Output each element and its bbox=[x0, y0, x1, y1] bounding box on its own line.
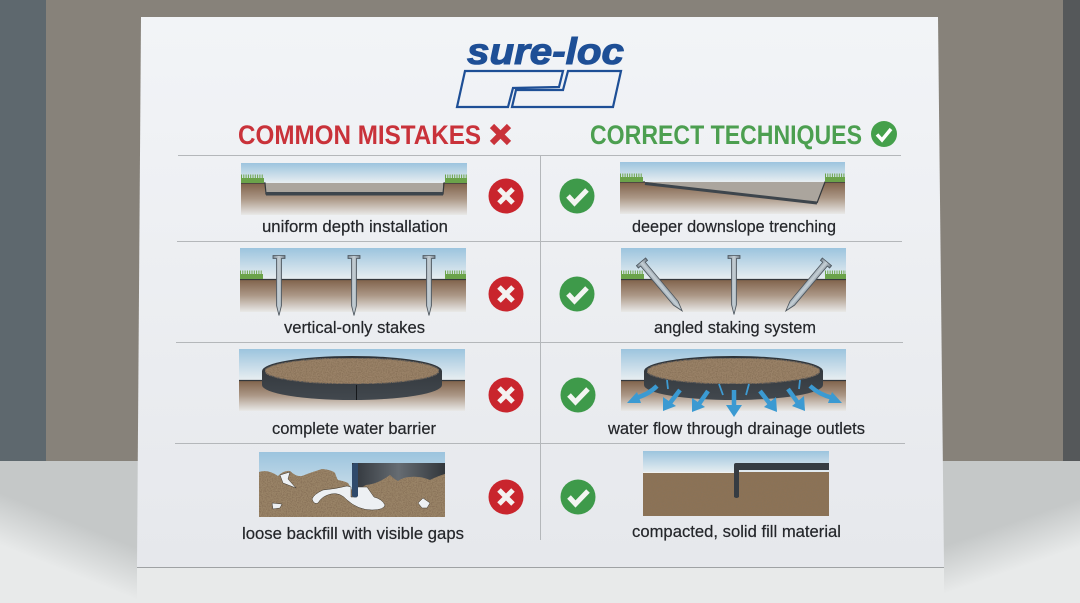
row 3 right: water flow through drainage outlets bbox=[607, 349, 865, 438]
row 4 right: compacted, solid fill material: compacted, solid fill material bbox=[632, 522, 841, 541]
row 1 left: uniform depth installation: uniform depth installation bbox=[262, 217, 448, 236]
table grid lines bbox=[175, 155, 905, 540]
row 4 left: loose backfill with visible gaps: loose backfill with visible gaps bbox=[242, 524, 464, 543]
heading: common mistakes: COMMON MISTAKES bbox=[238, 120, 481, 150]
row 3 left: complete water barrier bbox=[239, 349, 465, 438]
logo: sure-loc bbox=[457, 31, 624, 107]
icon: heading cross bbox=[492, 126, 509, 143]
icon: angled stakes bbox=[636, 256, 832, 315]
logo: sure-loc: sure-loc bbox=[467, 31, 624, 72]
row 3 left: complete water barrier: complete water barrier bbox=[272, 419, 436, 438]
white board panel bbox=[137, 17, 944, 568]
icon: heading check bbox=[871, 121, 897, 147]
row 2 right: angled staking system: angled staking system bbox=[654, 318, 816, 337]
row 2 left: vertical-only stakes: vertical-only stakes bbox=[284, 318, 425, 337]
row 4 left: loose backfill with visible gaps bbox=[242, 452, 464, 543]
icon: edging ring with outlets bbox=[644, 356, 823, 400]
row 3 right: water flow through drainage outlets: water flow through drainage outlets bbox=[607, 419, 865, 438]
row 1 right: deeper downslope trenching: deeper downslope trenching bbox=[632, 217, 836, 236]
row 2 left: vertical-only stakes bbox=[240, 248, 466, 337]
row 1 left: uniform depth installation bbox=[241, 163, 467, 236]
icon: vertical stakes bbox=[273, 256, 435, 316]
row 2 right: angled staking system bbox=[621, 248, 846, 337]
row 4 right: compacted, solid fill material bbox=[632, 451, 841, 541]
icons: green check badges bbox=[560, 178, 596, 514]
row 1 right: deeper downslope trenching bbox=[620, 162, 845, 236]
icon: blue water arrows bbox=[627, 386, 842, 417]
icon: closed edging ring bbox=[262, 356, 442, 400]
heading: correct techniques: CORRECT TECHNIQUES bbox=[590, 120, 862, 150]
icons: red cross badges bbox=[488, 178, 524, 514]
